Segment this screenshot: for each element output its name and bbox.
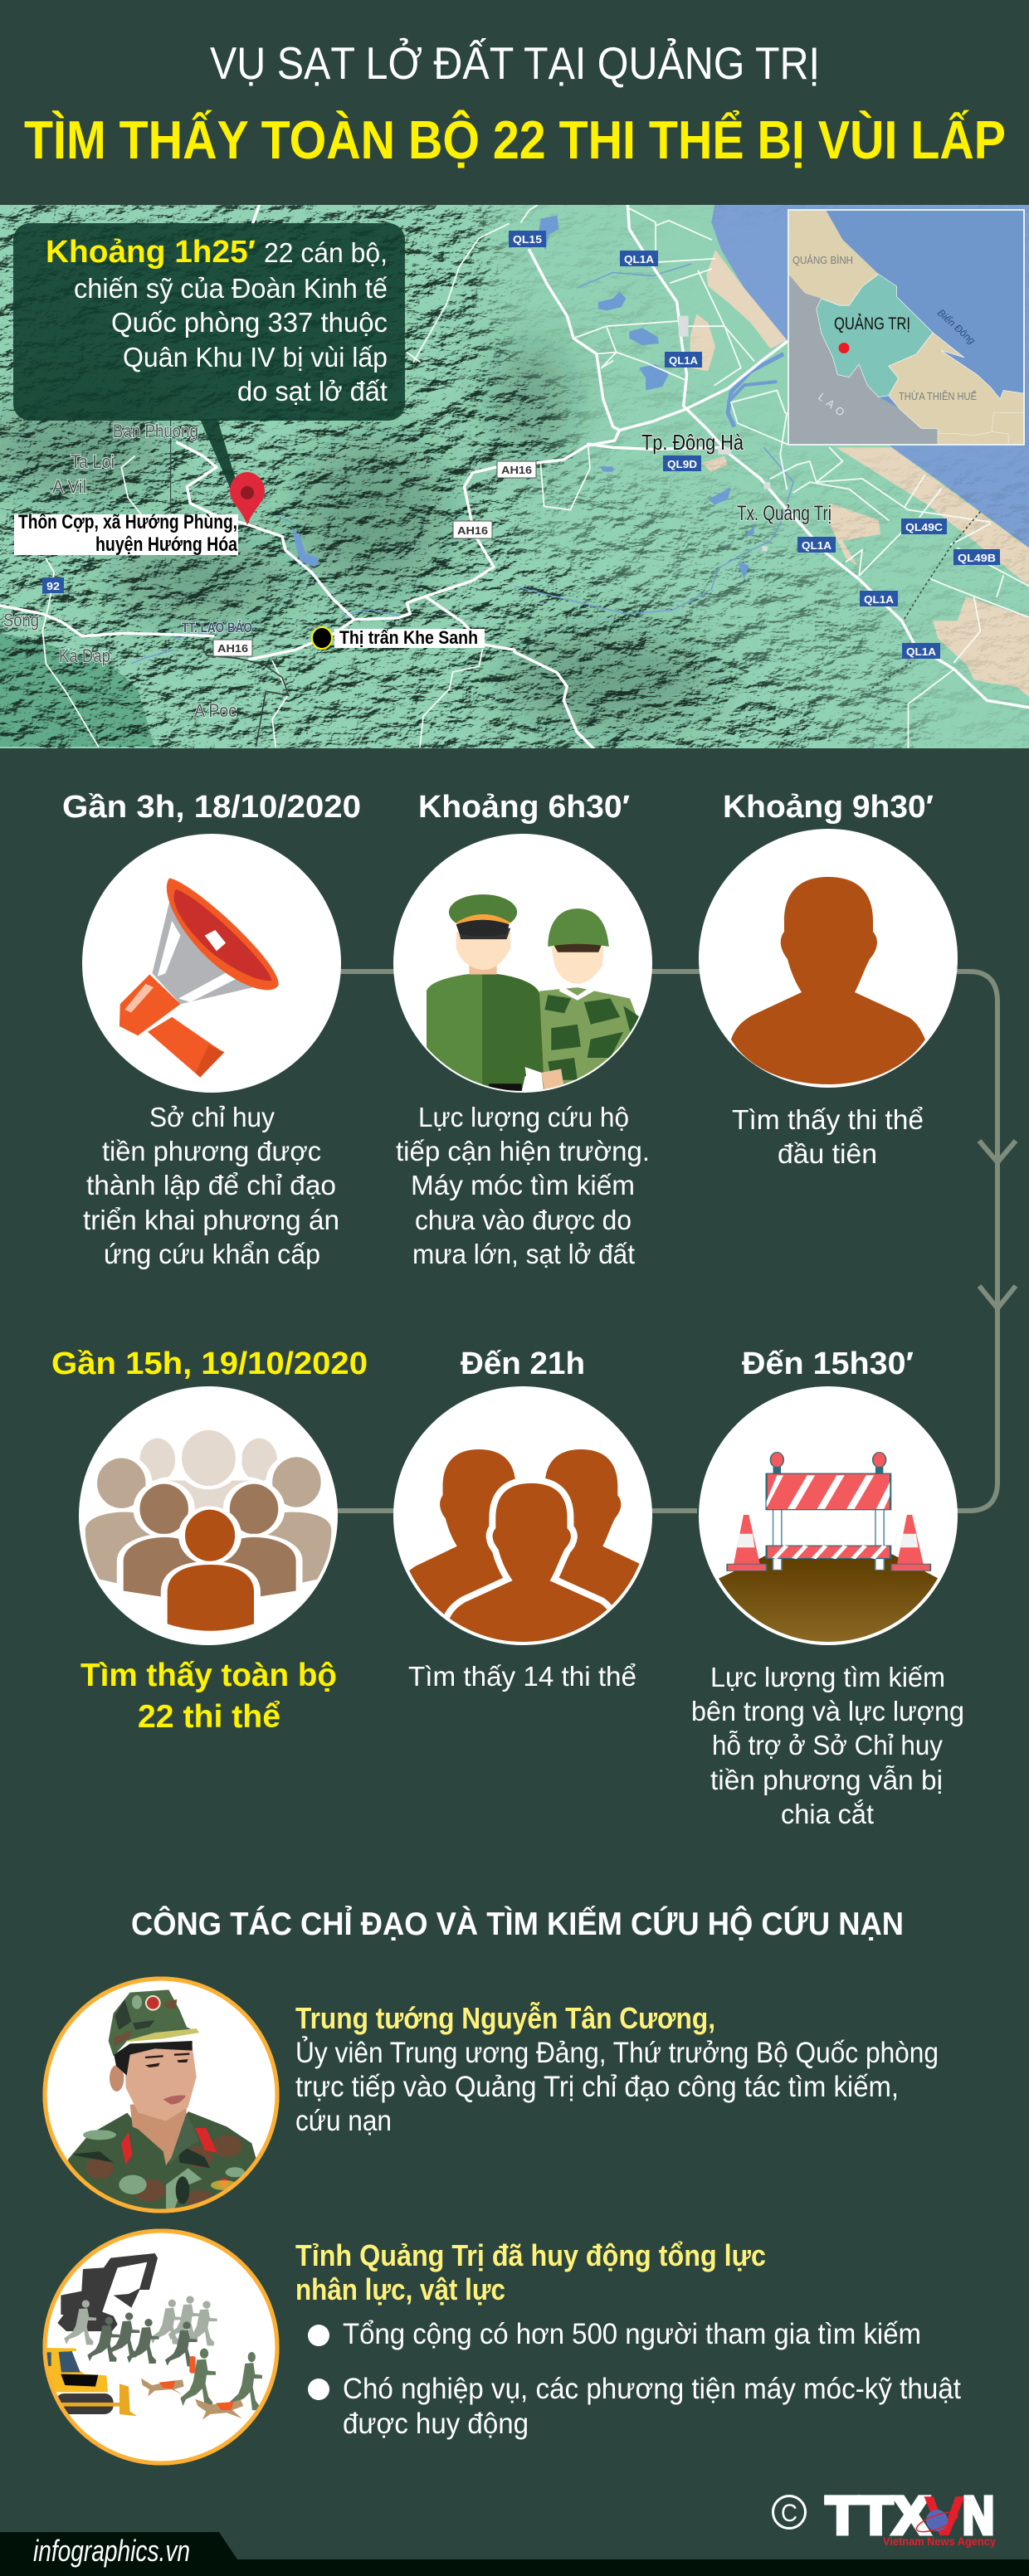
- description: tiếp cận hiện trường.: [396, 1136, 650, 1166]
- map: lakes and rivers: [514, 216, 793, 614]
- map: sea: [711, 205, 1029, 548]
- map: road number badges: 92: [46, 580, 60, 592]
- heading: Đến 15h30′: [742, 1346, 914, 1381]
- step 1: Gần 3h: [62, 790, 361, 1269]
- map: mountain shadow masses: [0, 340, 714, 730]
- map: place labels: TT. LAO BẢO: [182, 620, 252, 635]
- description: chia cắt: [781, 1799, 874, 1829]
- map: roads east: [514, 205, 1029, 748]
- description: [83, 1102, 339, 1269]
- logo: TTXVN: TTX: [826, 2486, 929, 2545]
- heading: Khoảng 9h30′: [723, 790, 934, 825]
- map: relief shading: [0, 205, 1029, 748]
- heading: nhân lực, vật lực: [295, 2272, 505, 2306]
- description: Ủy viên Trung ương Đảng, Thứ trưởng Bộ Quốc phòng: [295, 2036, 939, 2069]
- description: [691, 1662, 964, 1829]
- icon: copyright mark: [773, 2496, 805, 2529]
- panel: general Nguyễn Tân Cương: [45, 1979, 939, 2213]
- icon: crowd of silhouettes: [79, 1386, 338, 1645]
- map: road number badges: QL1A: [864, 593, 895, 606]
- title line 1: VỤ SẠT LỞ ĐẤT TẠI QUẢNG TRỊ: [210, 37, 820, 89]
- step 2: Khoảng 6h30: [393, 790, 652, 1269]
- footer: site name: infographics.vn: [33, 2534, 190, 2568]
- icon: copyright mark: C: [781, 2500, 797, 2527]
- description: Tìm thấy toàn bộ: [80, 1658, 337, 1693]
- callout text: Khoảng 1h25′: [46, 235, 256, 270]
- inset locator map: [783, 205, 1027, 447]
- description: [396, 1102, 650, 1269]
- footer band: [0, 2532, 1029, 2576]
- description: thành lập để chỉ đạo: [86, 1170, 336, 1200]
- bullet 1: Tổng cộng có hơn 500 người tham gia tìm kiếm: [343, 2318, 921, 2350]
- callout text: Quốc phòng 337 thuộc: [111, 307, 388, 338]
- description: Tìm thấy thi thể: [732, 1104, 924, 1135]
- description: Máy móc tìm kiếm: [411, 1170, 635, 1200]
- description: hỗ trợ ở Sở Chỉ huy: [712, 1730, 943, 1760]
- heading: Gần 3h, 18/10/2020: [62, 790, 361, 825]
- map: road number badges: AH16: [501, 464, 532, 476]
- map: road number badges: QL9D: [667, 458, 697, 470]
- illustration: rescuers, dogs and machinery: [44, 2231, 277, 2463]
- panel: map of Quảng Trị: [0, 205, 1029, 748]
- callout text: Quân Khu IV bị vùi lấp: [123, 342, 388, 373]
- map: road number badges: [42, 231, 1000, 659]
- callout text: [46, 235, 388, 407]
- description: đầu tiên: [778, 1138, 877, 1169]
- description: Tìm thấy 14 thi thể: [408, 1661, 636, 1692]
- label: Thôn Cợp: huyện Hướng Hóa: [95, 533, 238, 556]
- map: place labels: Tx. Quảng Trị: [737, 502, 831, 525]
- icon: one person silhouette: [699, 829, 958, 1088]
- description: trực tiếp vào Quảng Trị chỉ đạo công tác tìm kiếm,: [295, 2071, 899, 2103]
- name: Trung tướng Nguyễn Tân Cương,: [295, 2001, 715, 2035]
- bullet 2: Chó nghiệp vụ, các phương tiện máy móc-kỹ thuật: [343, 2373, 961, 2405]
- label: Thôn Cợp: Thôn Cợp, xã Hướng Phùng,: [18, 511, 237, 533]
- label: Khe Sanh marker: Thị trấn Khe Sanh: [339, 627, 478, 648]
- title block: [24, 37, 1006, 170]
- icon: megaphone: [82, 834, 341, 1093]
- map: road number badges: QL49B: [958, 552, 996, 564]
- description: tiền phương vẫn bị: [710, 1765, 943, 1795]
- inset red dot: [838, 343, 850, 353]
- map: road number badges: QL1A: [669, 354, 699, 367]
- map: road number badges: QL1A: [906, 645, 937, 658]
- description: Lực lượng cứu hộ: [418, 1102, 629, 1132]
- description: Lực lượng tìm kiếm: [710, 1662, 945, 1692]
- logo: TTXVN: [826, 2485, 996, 2548]
- description: ứng cứu khẩn cấp: [104, 1239, 320, 1269]
- description: [80, 1658, 337, 1735]
- map: place labels: Ka Dap: [59, 645, 110, 666]
- map: road number badges: AH16: [457, 524, 488, 537]
- inset labels: [792, 254, 978, 421]
- heading: Khoảng 6h30′: [418, 790, 630, 825]
- map: place labels: Ta Loi: [71, 451, 115, 472]
- section heading: CÔNG TÁC CHỈ ĐẠO VÀ TÌM KIẾM CỨU HỘ CỨU NẠN: [131, 1905, 904, 1942]
- inset labels: THỪA THIÊN HUẾ: [899, 390, 977, 402]
- callout: pointer and box: [13, 223, 405, 488]
- inset labels: LAO: [816, 391, 851, 421]
- icon: two soldiers: [393, 834, 652, 1095]
- description: tiền phương được: [102, 1136, 321, 1166]
- icon: road barricade and cones: [699, 1386, 958, 1647]
- map: place labels: A Vil: [52, 476, 86, 497]
- label: Thôn Cợp: [14, 511, 238, 556]
- description: 22 thi thể: [138, 1699, 280, 1735]
- map: roads west: [0, 415, 514, 747]
- map: road number badges: QL15: [513, 233, 542, 246]
- map: road number badges: QL49C: [905, 521, 944, 533]
- description: cứu nạn: [295, 2105, 392, 2137]
- step 5: Đến 21h: [393, 1346, 661, 1692]
- inset labels: QUẢNG BÌNH: [792, 254, 853, 266]
- map: road number badges: QL1A: [802, 539, 832, 552]
- inset labels: QUẢNG TRỊ: [834, 314, 910, 334]
- description: [295, 2036, 939, 2137]
- map: sandy plains: [690, 250, 1029, 697]
- step 6: Gần 15h final: [51, 1346, 368, 1735]
- description: mưa lớn, sạt lở đất: [412, 1239, 635, 1269]
- description: chưa vào được do: [415, 1205, 632, 1235]
- callout text: do sạt lở đất: [237, 376, 388, 407]
- icon: three person silhouettes: [393, 1386, 661, 1658]
- map: place labels: Ban Phuong: [113, 421, 198, 441]
- heading: Gần 15h, 19/10/2020: [51, 1346, 368, 1381]
- bullet 2: được huy động: [343, 2408, 529, 2440]
- description: bên trong và lực lượng: [691, 1696, 964, 1726]
- map: place labels: Tp. Đông Hà: [641, 430, 744, 455]
- description: Sở chỉ huy: [149, 1102, 275, 1132]
- map: road north-west and north: [252, 205, 509, 362]
- callout text: chiến sỹ của Đoàn Kinh tế: [74, 273, 388, 304]
- icon: location pin: [230, 472, 265, 525]
- description: triển khai phương án: [83, 1205, 339, 1235]
- description: [732, 1104, 924, 1169]
- panel: mobilisation of Quảng Trị province: [44, 2231, 961, 2463]
- map: road number badges: AH16: [217, 642, 248, 655]
- inset labels: Biển Đông: [935, 307, 978, 347]
- map: darker forest zone: [0, 633, 154, 747]
- step 4: Đến 15h30: [691, 1346, 964, 1829]
- heading: Đến 21h: [461, 1346, 585, 1381]
- timeline connector with arrows: [332, 971, 1016, 1511]
- heading: [295, 2238, 766, 2306]
- heading: Tỉnh Quảng Trị đã huy động tổng lực: [295, 2238, 766, 2272]
- step 3: Khoảng 9h30: [699, 790, 958, 1169]
- logo: TTXVN: N: [963, 2486, 994, 2545]
- map: place labels: A Poc: [194, 700, 237, 721]
- logo: TTXVN: Vietnam News Agency: [883, 2535, 996, 2548]
- map: road number badges: QL1A: [624, 253, 655, 265]
- callout text: 22 cán bộ,: [264, 237, 388, 268]
- logo: TTXVN: V: [924, 2485, 965, 2548]
- map: place labels: [3, 421, 831, 721]
- portrait: [45, 1979, 277, 2213]
- map: place labels: Song: [3, 610, 39, 631]
- bullet 2: [308, 2373, 961, 2440]
